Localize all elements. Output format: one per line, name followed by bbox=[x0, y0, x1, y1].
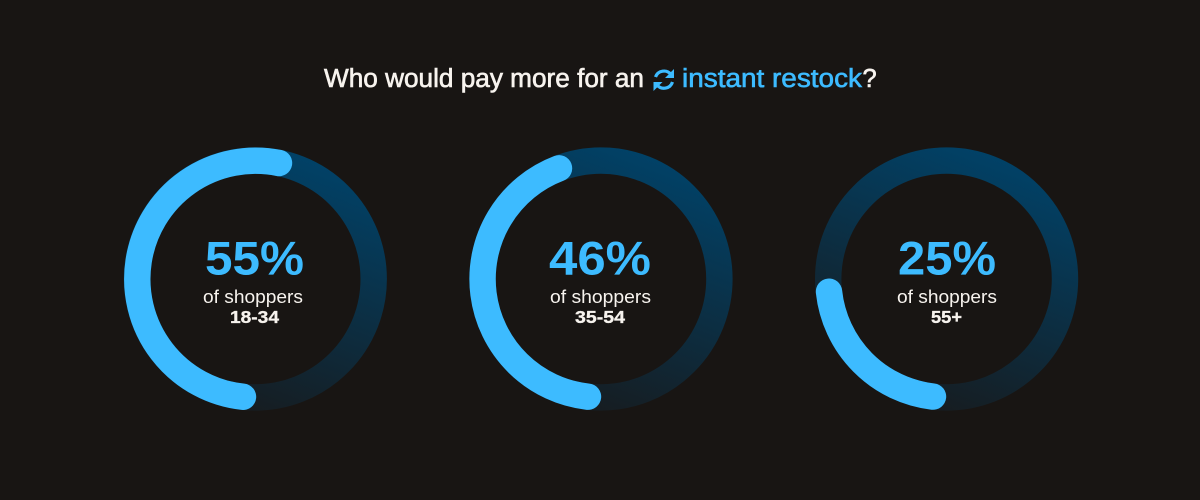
value 46%: 46% bbox=[549, 232, 651, 284]
label age 18-34: 18-34 bbox=[230, 307, 279, 327]
label of shoppers: of shoppers bbox=[203, 286, 303, 307]
value arc 55% bbox=[137, 161, 279, 397]
icon: refresh arrows bbox=[654, 69, 674, 91]
value arc 25% bbox=[829, 292, 933, 397]
value 25%: 25% bbox=[898, 232, 996, 284]
label age 55+: 55+ bbox=[931, 307, 962, 327]
title: instant restock bbox=[682, 65, 862, 93]
track ring bbox=[137, 161, 374, 397]
title: Who would pay more for an bbox=[324, 65, 644, 93]
value arc 46% bbox=[483, 168, 588, 397]
label of shoppers: of shoppers bbox=[897, 286, 997, 307]
title bbox=[324, 65, 877, 93]
donut chart: shoppers 55+ bbox=[828, 161, 1065, 397]
donut chart: shoppers 18-34 bbox=[137, 161, 374, 397]
track ring bbox=[483, 161, 719, 397]
title: ? bbox=[862, 65, 877, 93]
value 55%: 55% bbox=[205, 232, 304, 284]
label of shoppers: of shoppers bbox=[550, 286, 651, 307]
label age 35-54: 35-54 bbox=[575, 307, 625, 327]
donut chart: shoppers 35-54 bbox=[483, 161, 719, 397]
track ring bbox=[828, 161, 1065, 397]
